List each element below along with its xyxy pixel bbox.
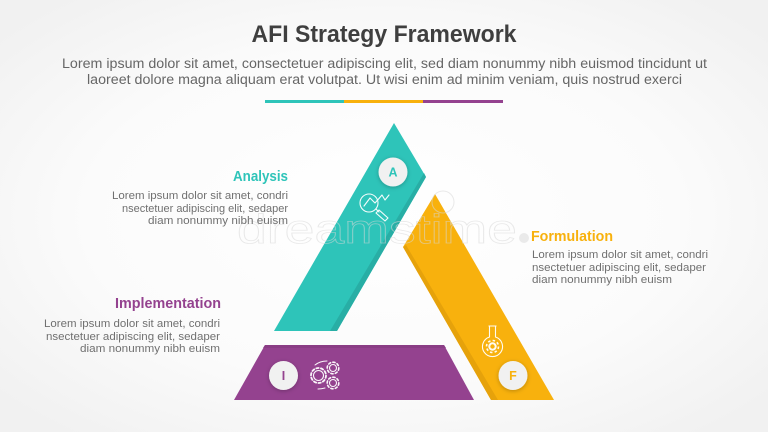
icon: magnifier with trend line: [360, 194, 389, 221]
label: analysis: Lorem ipsum dolor sit amet, condri: [112, 190, 288, 202]
label: formulation: diam nonummy nibh euism: [532, 274, 672, 286]
label: implementation: [44, 296, 221, 355]
label: analysis: [112, 169, 288, 227]
label: formulation: Lorem ipsum dolor sit amet, condri: [532, 249, 708, 261]
label: analysis: nsectetuer adipiscing elit, sedaper: [122, 203, 288, 215]
icon: flask with gear: [482, 326, 502, 357]
label: formulation: nsectetuer adipiscing elit, sedaper: [532, 262, 706, 274]
icon: gears with arrows: [311, 361, 339, 389]
label: formulation: [531, 229, 708, 286]
watermark: [237, 191, 529, 252]
badge A: [378, 158, 408, 186]
triangle segment: analysis: [274, 123, 426, 331]
tricolor divider: [265, 100, 503, 103]
triangle segment: formulation: [403, 194, 554, 400]
label: implementation: nsectetuer adipiscing elit, sedaper: [46, 331, 220, 343]
label: formulation: Formulation: [531, 229, 613, 245]
label: analysis: Analysis: [233, 169, 288, 185]
label: analysis: diam nonummy nibh euism: [148, 215, 288, 227]
label: implementation: Implementation: [115, 296, 221, 312]
badge I: I: [282, 369, 285, 383]
badge I: [269, 361, 298, 390]
badge A: A: [388, 166, 398, 180]
intro text: laoreet dolore magna aliquam erat volutpat. Ut wisi enim ad minim veniam, quis nostrud exerci: [87, 72, 682, 87]
watermark: dreamstime: [237, 206, 517, 252]
intro text: [62, 56, 707, 87]
label: implementation: Lorem ipsum dolor sit amet, condri: [44, 318, 220, 330]
badge F: [498, 361, 528, 390]
badge F: F: [509, 369, 517, 383]
triangle segment: implementation: [234, 345, 474, 400]
intro text: Lorem ipsum dolor sit amet, consectetuer adipiscing elit, sed diam nonummy nibh euismod tincidunt ut: [62, 56, 707, 71]
title: AFI Strategy Framework: [252, 21, 517, 48]
label: implementation: diam nonummy nibh euism: [80, 343, 220, 355]
